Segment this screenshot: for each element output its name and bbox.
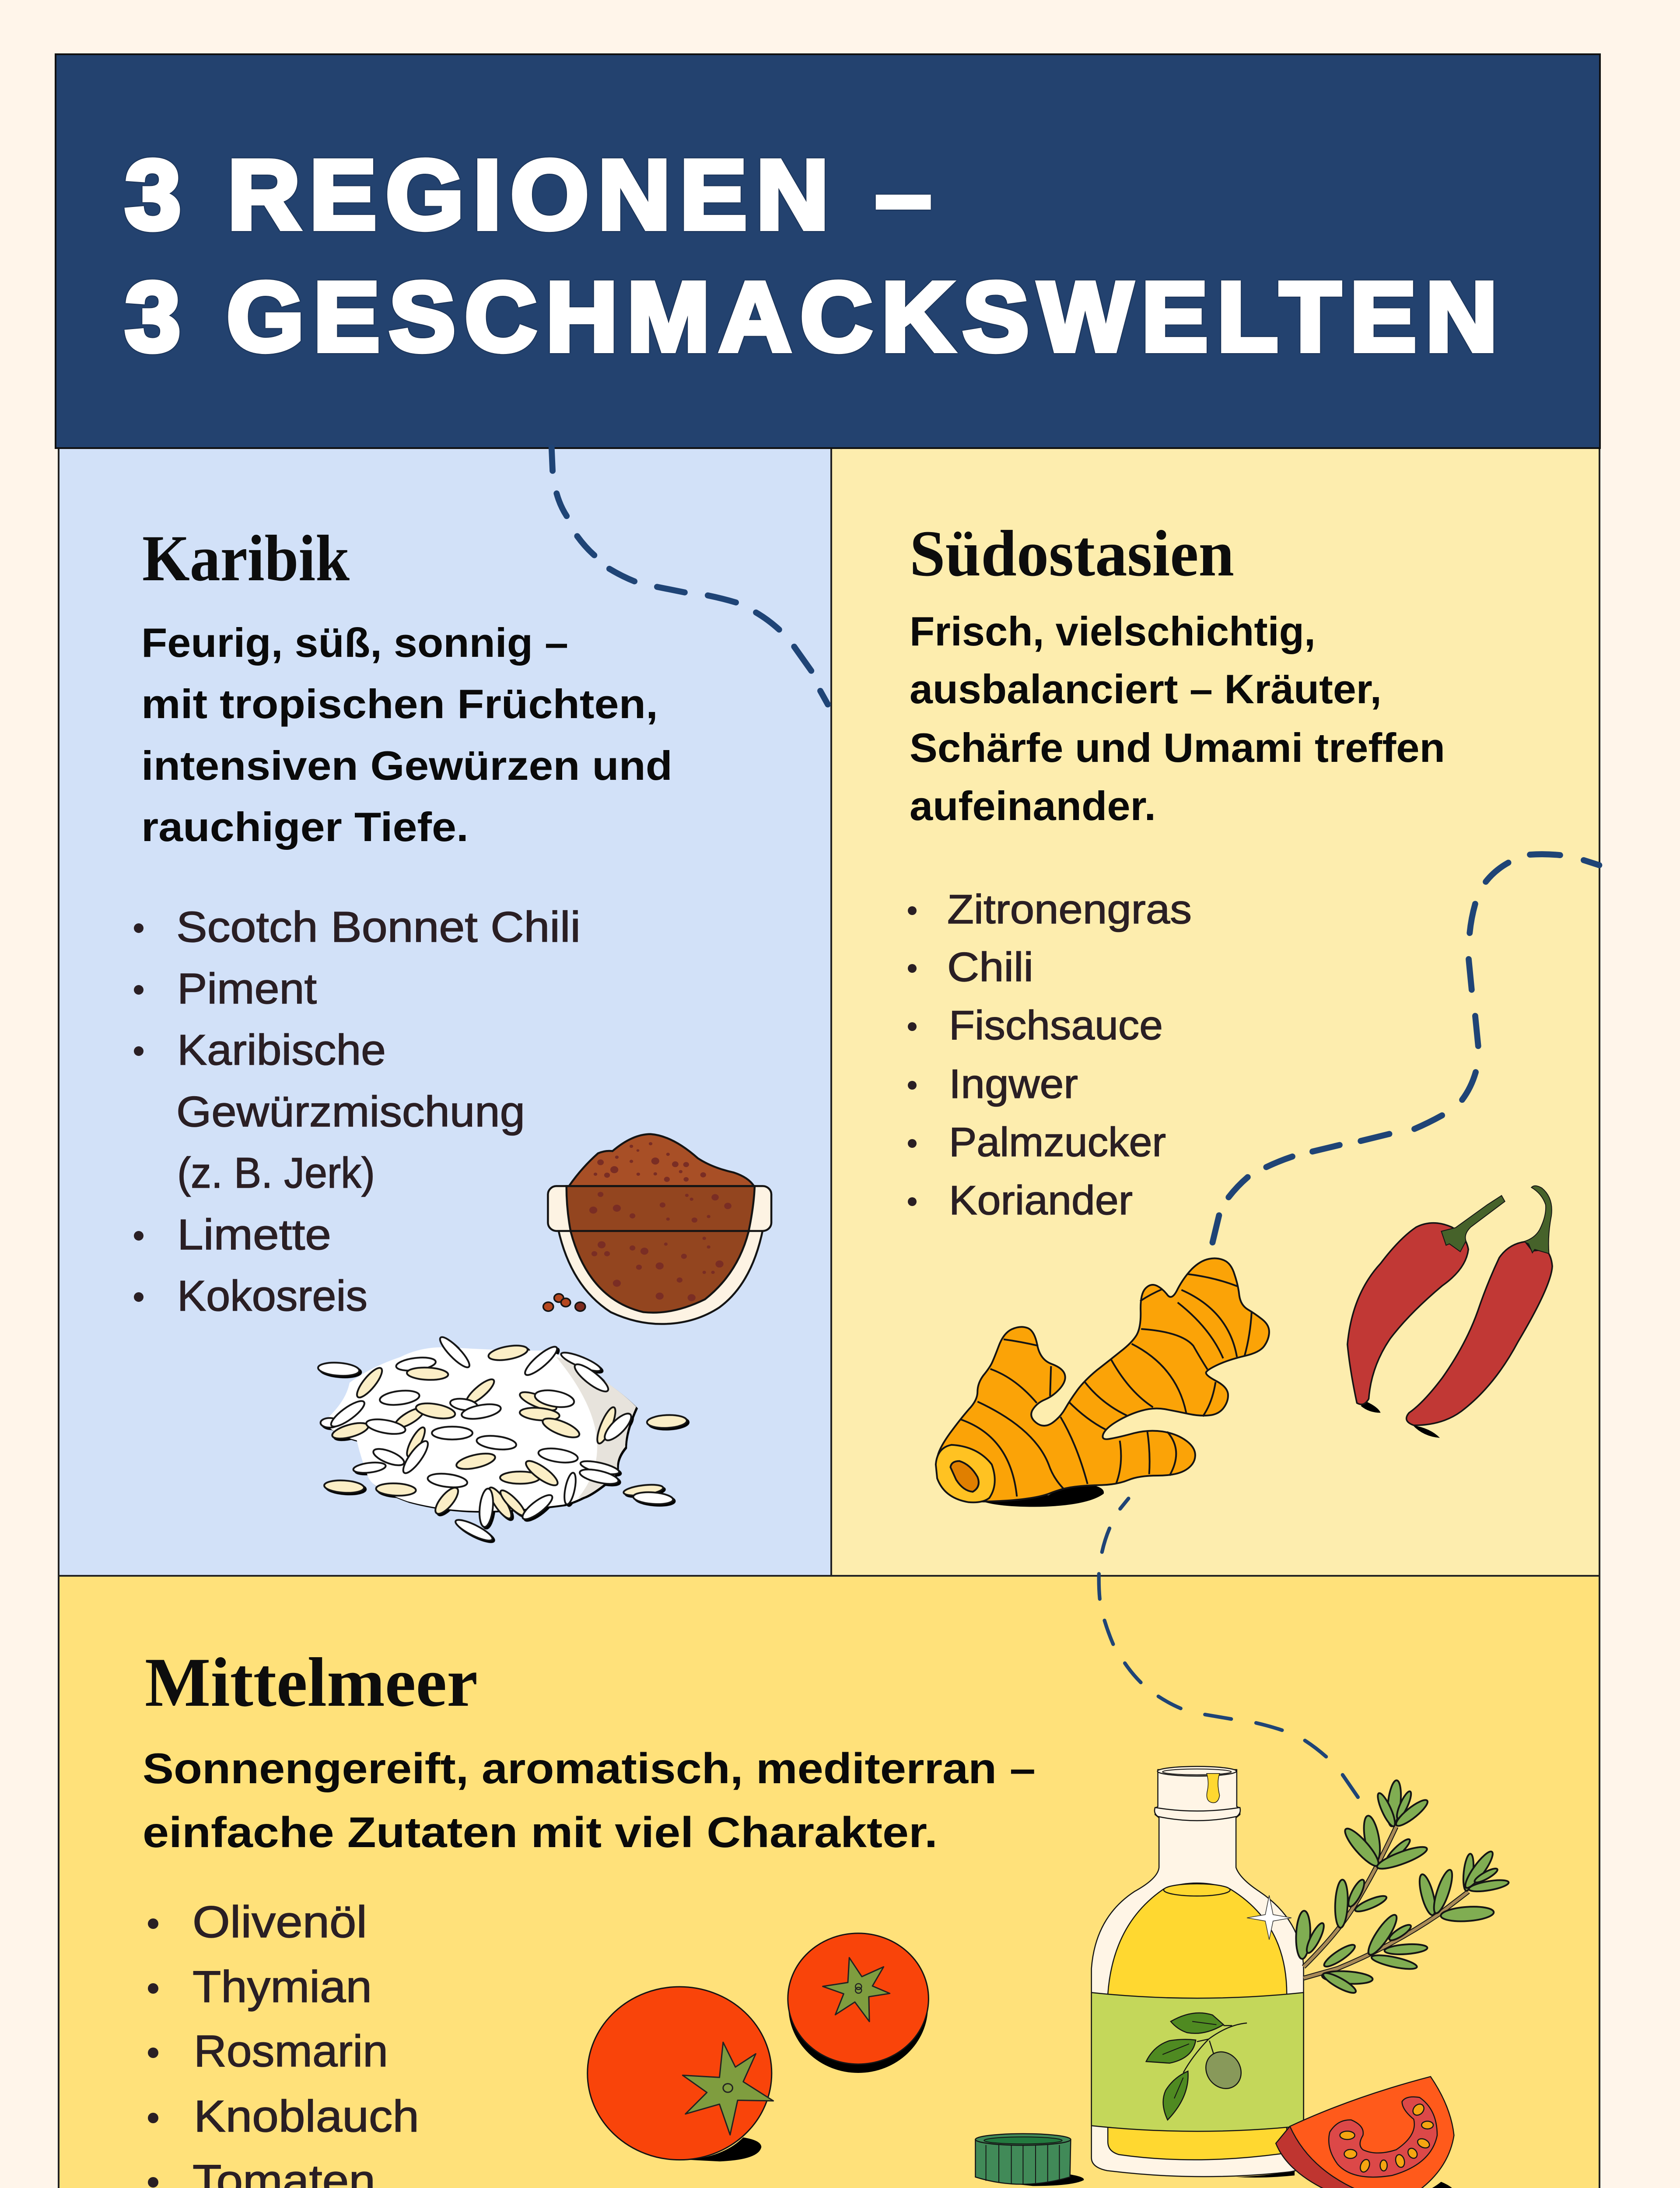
- text block: Karibik description: intensiven Gewürzen und: [141, 743, 672, 789]
- icon: tomato slice: [1276, 2076, 1455, 2188]
- text block: Südostasien description: ausbalanciert – Kräuter,: [910, 666, 1382, 712]
- text block: Mittelmeer description: Sonnengereift, aromatisch, mediterran –: [143, 1744, 1036, 1792]
- text block: Südostasien description: Frisch, vielschichtig,: [910, 608, 1316, 654]
- text block: Karibik description: mit tropischen Früchten,: [141, 681, 658, 727]
- ingredient list: Mittelmeer: [148, 1897, 649, 2188]
- icon: spice bowl: [543, 1134, 771, 1324]
- ingredient list: Südostasien: Chili: [947, 944, 1033, 990]
- header banner: [56, 54, 1600, 448]
- text block: Mittelmeer description: [143, 1744, 1036, 1856]
- ingredient list: Südostasien: Ingwer: [949, 1061, 1078, 1107]
- ingredient list: Karibik: [134, 903, 581, 1320]
- ingredient list: Karibik: Karibische: [177, 1026, 386, 1074]
- ingredient list: Südostasien: [908, 886, 1192, 1223]
- ingredient list: Mittelmeer: Olivenöl: [192, 1897, 367, 1947]
- ingredient list: Karibik: Piment: [177, 964, 317, 1013]
- ingredient list: Südostasien: Koriander: [949, 1177, 1133, 1223]
- ingredient list: Südostasien: Fischsauce: [949, 1002, 1163, 1048]
- text block: Karibik description: Feurig, süß, sonnig –: [141, 620, 568, 666]
- icon: ginger: [936, 1259, 1269, 1507]
- ingredient list: Mittelmeer: Knoblauch: [194, 2091, 419, 2141]
- ingredient list: Mittelmeer: Rosmarin: [194, 2026, 388, 2076]
- ingredient list: Karibik: Kokosreis: [177, 1272, 368, 1320]
- ingredient list: Südostasien: Zitronengras: [947, 886, 1192, 932]
- title: [125, 140, 1507, 372]
- icon: olive oil bottle: [1092, 1767, 1304, 2177]
- panel: Südostasien: [831, 448, 1600, 1576]
- text block: Karibik description: [141, 620, 672, 850]
- heading: Mittelmeer: Mittelmeer: [145, 1643, 478, 1721]
- text block: Karibik description: rauchiger Tiefe.: [141, 804, 469, 850]
- ingredient list: Mittelmeer: Thymian: [192, 1962, 372, 2012]
- text block: Südostasien description: [910, 608, 1445, 829]
- text block: Mittelmeer description: einfache Zutaten mit viel Charakter.: [143, 1808, 938, 1856]
- arrow: dashed route ginger to Mittelmeer: [1099, 1498, 1358, 1797]
- ingredient list: Karibik: (z. B. Jerk): [177, 1149, 375, 1197]
- ingredient list: Südostasien: Palmzucker: [949, 1119, 1166, 1165]
- icon: thyme sprig: [1295, 1780, 1510, 1996]
- ingredient list: Karibik: Gewürzmischung: [176, 1087, 525, 1136]
- text block: Südostasien description: Schärfe und Umami treffen: [910, 725, 1445, 771]
- icon: rice pile: [318, 1334, 687, 1544]
- heading: Karibik: Karibik: [142, 522, 350, 595]
- arrow: dashed route Karibik to Südostasien: [552, 448, 828, 705]
- icon: tomatoes: [588, 1933, 928, 2161]
- ingredient list: Karibik: Limette: [177, 1210, 331, 1259]
- title: 3 REGIONEN –: [125, 140, 941, 249]
- arrow: dashed route Südostasien to ginger: [1212, 854, 1599, 1242]
- panel: Mittelmeer: [59, 1576, 1600, 2188]
- text block: Südostasien description: aufeinander.: [910, 783, 1156, 829]
- title: 3 GESCHMACKSWELTEN: [125, 262, 1507, 372]
- panel: Karibik: [59, 448, 831, 1576]
- heading: Südostasien: Südostasien: [910, 517, 1234, 590]
- icon: red chilies: [1348, 1186, 1552, 1438]
- icon: green bottle cap: [975, 2134, 1084, 2186]
- ingredient list: Karibik: Scotch Bonnet Chili: [176, 903, 581, 951]
